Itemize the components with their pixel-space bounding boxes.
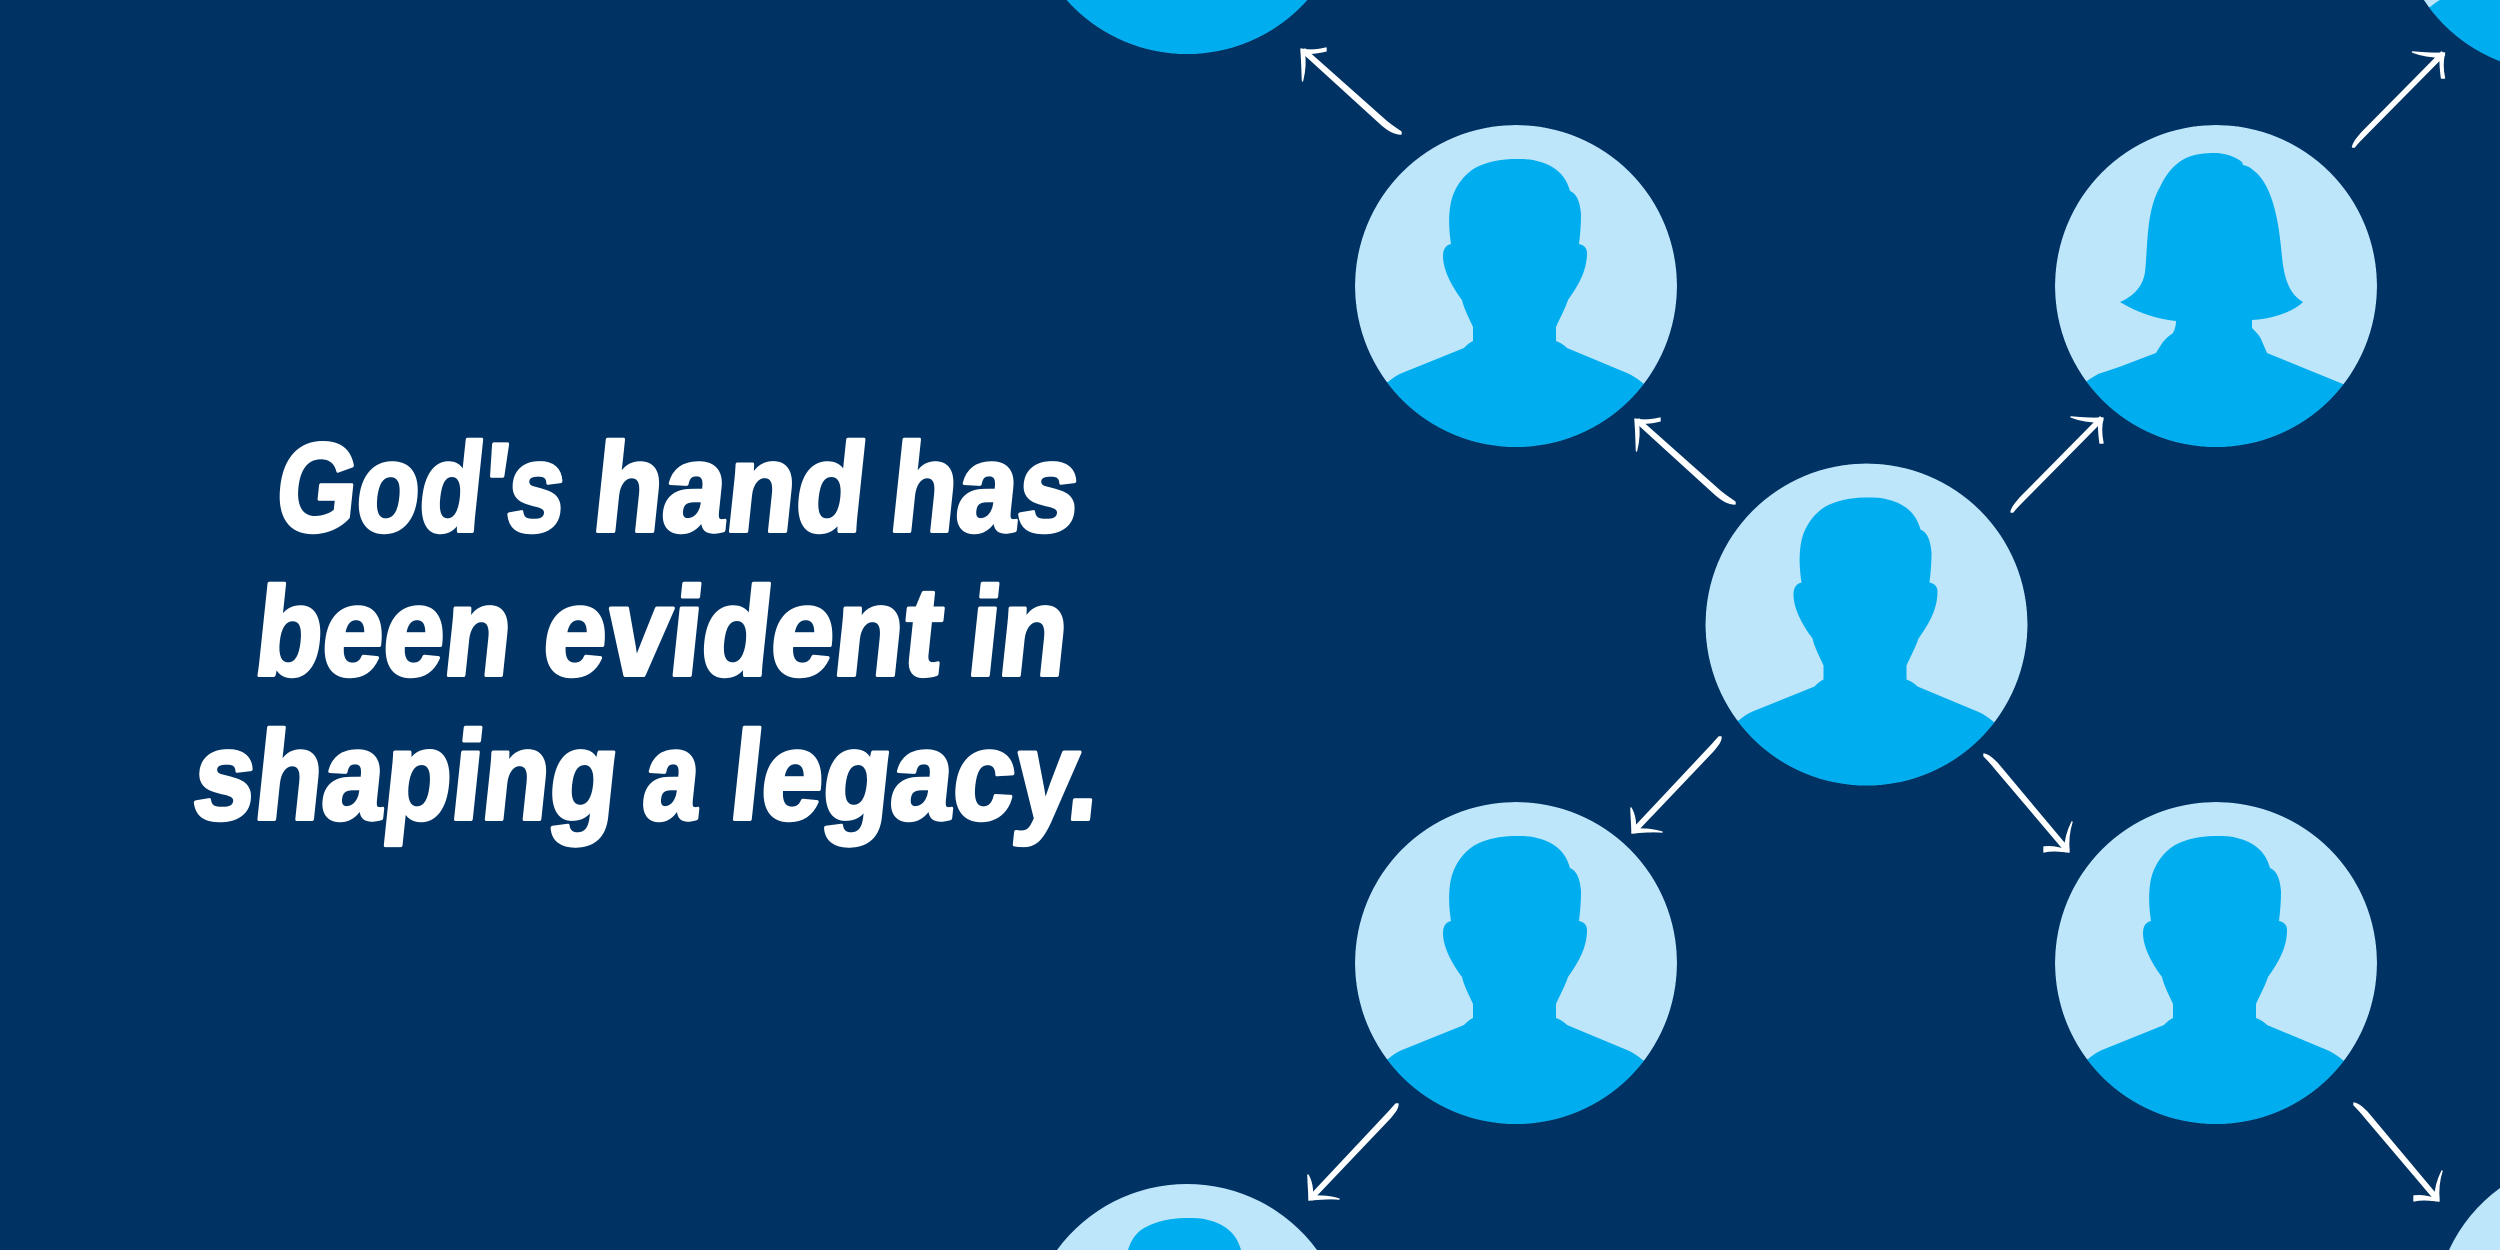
arrow: upper left to top left (1301, 48, 1401, 134)
arrow: centre to lower right (1984, 754, 2072, 852)
person node: centre man (1666, 464, 2066, 824)
headline text: evident (537, 561, 950, 702)
person node: lower left man (1316, 802, 1716, 1163)
headline text (187, 417, 1108, 846)
person node: upper left man (1316, 125, 1716, 486)
headline text: has (884, 417, 1087, 558)
headline text: a (637, 705, 709, 846)
person node: bottom left partial (1057, 1184, 1317, 1250)
arrow: centre to upper right (2011, 417, 2103, 512)
arrow: lower right to bottom right (2354, 1103, 2442, 1201)
arrow: upper right to top right (2352, 52, 2444, 147)
person node: upper right woman (2016, 125, 2416, 486)
headline text: shaping (187, 705, 626, 846)
person node: top right partial (2358, 0, 2500, 111)
headline text: legacy. (724, 705, 1108, 846)
headline text: hand (587, 417, 874, 558)
arrow: lower left to bottom left (1308, 1104, 1398, 1200)
person node: top left partial (987, 0, 1387, 93)
arrow: centre to upper left (1635, 418, 1735, 504)
headline text: been (249, 561, 520, 702)
person node: bottom right partial (2449, 1188, 2500, 1250)
headline text: God's (270, 417, 573, 558)
headline text: in (962, 561, 1076, 702)
person node: lower right man (2016, 802, 2416, 1163)
arrow: centre to lower left (1631, 737, 1721, 833)
